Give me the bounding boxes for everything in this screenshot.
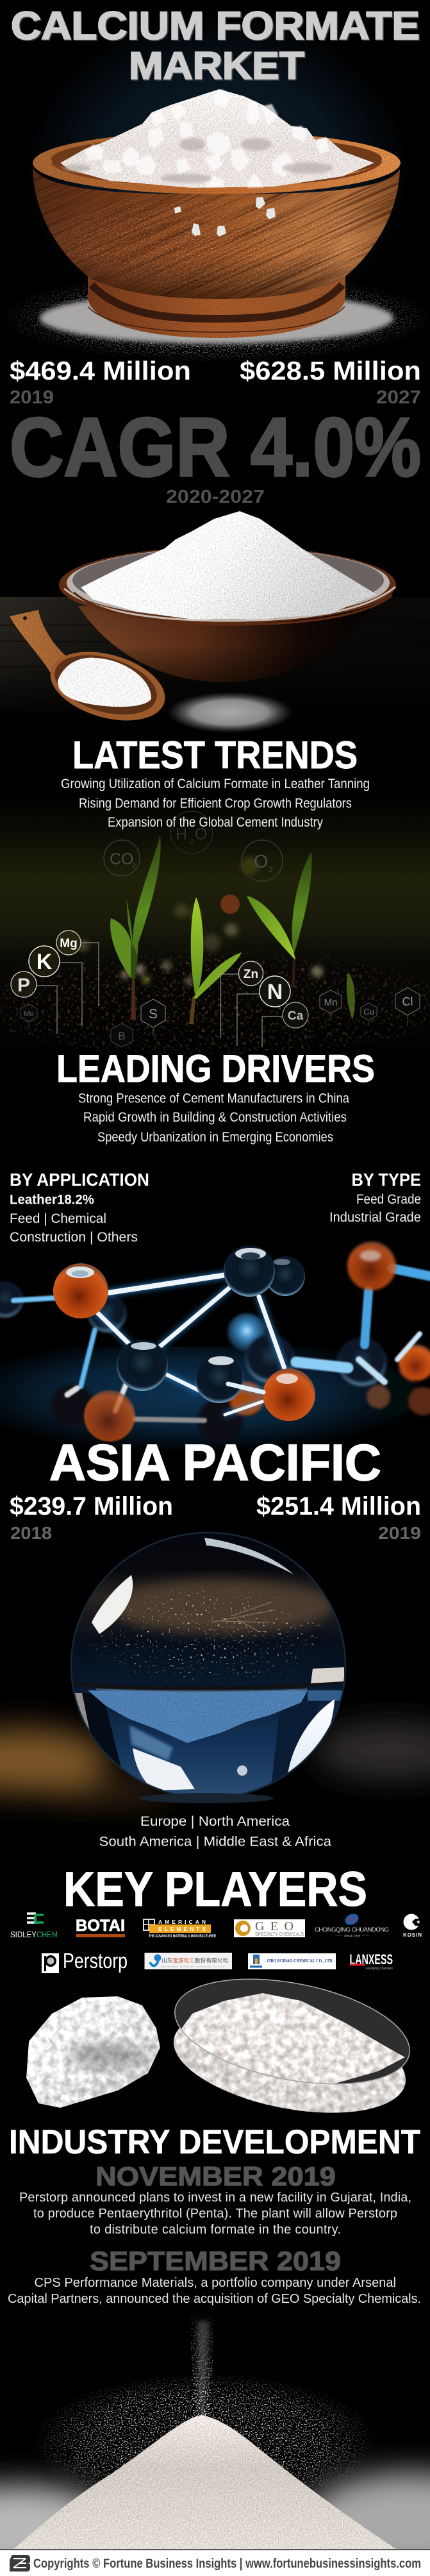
panel: seedlings with nutrient elements <box>0 795 430 1065</box>
logo: Lanxess <box>350 1951 393 1971</box>
orange atom back low <box>84 1390 135 1442</box>
title: CALCIUM FORMATE <box>12 5 420 49</box>
gas circle H2O: O <box>195 825 207 843</box>
segment: by type <box>329 1170 421 1225</box>
segment: by application: Leather18.2% <box>10 1193 94 1207</box>
stat: 2027 market value: $628.5 Million <box>240 356 421 385</box>
segment: by type: BY TYPE <box>351 1170 421 1190</box>
water line <box>72 1681 345 1688</box>
driver list: Speedy Urbanization in Emerging Economies <box>97 1130 333 1145</box>
development: November 2019: Perstorp announced plans to invest in a new facility in Gujarat, India, <box>19 2191 411 2205</box>
panel: powder rock and petri dish <box>26 1979 410 2113</box>
stat: 2019 market value: $469.4 Million <box>10 356 191 385</box>
dish wall with powder <box>165 1992 415 2130</box>
heading: leading drivers: LEADING DRIVERS <box>56 1047 375 1090</box>
development: September 2019 <box>8 2246 421 2306</box>
red bokeh <box>220 895 240 914</box>
panel: hero bowl of calcium formate crystals <box>3 29 430 362</box>
orange atom F <box>263 1368 315 1421</box>
powder pile <box>81 511 377 619</box>
logo: Shandong Baoyuan: SHANDONG BAOYUAN CHEMICAL CO.,LTD. <box>161 1966 226 1968</box>
gas circle CO2: CO <box>110 850 133 868</box>
white bonds <box>97 1275 285 1415</box>
stat: 2019 market value: 2019 <box>10 387 54 408</box>
nutrient connector lines <box>36 943 283 1047</box>
stat: asia pacific 2019: $251.4 Million <box>256 1492 421 1520</box>
wooden table <box>0 597 430 719</box>
dark atom B <box>224 1245 275 1297</box>
hex element Cl <box>395 988 420 1026</box>
logo: Sidleychem <box>10 1914 58 1939</box>
gas circle O2: O <box>254 852 269 872</box>
hex element Mo <box>21 1004 37 1029</box>
logo: American Elements: AMERICAN <box>158 1919 206 1925</box>
hex element B: B <box>118 1030 126 1042</box>
trend list: Expansion of the Global Cement Industry <box>108 815 323 830</box>
logo: American Elements: THE ADVANCED MATERIALS MANUFACTURER <box>149 1935 217 1939</box>
bowl rim <box>59 546 396 623</box>
element P <box>11 972 37 997</box>
title: MARKET <box>129 45 305 88</box>
wooden spoon <box>10 610 173 732</box>
logo: American Elements: ELEMENTS <box>158 1926 206 1932</box>
segment: by application <box>10 1170 149 1245</box>
development: November 2019: to produce Pentaerythritol (Penta). The plant will allow Perstorp <box>33 2207 397 2221</box>
blue background bonds <box>13 1268 430 1420</box>
footer <box>0 2549 430 2576</box>
development: November 2019: NOVEMBER 2019 <box>95 2161 336 2191</box>
logo: Perstorp: Perstorp <box>63 1949 128 1973</box>
trend list: Rising Demand for Efficient Crop Growth Regulators <box>79 796 352 811</box>
feather highlight <box>211 1602 276 1632</box>
element P: P <box>17 975 30 996</box>
stat: asia pacific 2019 <box>256 1492 421 1543</box>
salt flakes on bowl <box>174 197 276 237</box>
hex element Cu: Cu <box>363 1007 374 1016</box>
orange atom A <box>53 1263 108 1318</box>
hex element S <box>141 999 165 1036</box>
logo: Zibo Ruibao: ZIBO RUIBAO CHEMICAL CO., LTD. <box>267 1958 333 1964</box>
stat: 2027 market value <box>240 356 421 408</box>
element Ca: Ca <box>288 1009 304 1023</box>
logo: Chongqing Chuandong: SINCE 1998 <box>344 1934 361 1937</box>
logo: Zibo Ruibao <box>248 1953 336 1969</box>
crystal salt pile <box>60 89 374 188</box>
bubbles <box>80 1584 336 1687</box>
title: MARKET <box>129 44 304 87</box>
seedling 3 <box>247 852 312 988</box>
logo: Botai: BOTAI <box>76 1917 125 1935</box>
panel: crystal ball <box>0 1529 430 1803</box>
logo: Sidleychem: SIDLEY <box>10 1930 37 1939</box>
blurred background atoms <box>0 1281 430 1443</box>
logo: GEO Specialty Chemicals: GEO <box>255 1919 294 1933</box>
rim front edge <box>74 593 392 625</box>
element Mg: Mg <box>60 937 78 950</box>
gas circle O2: 2 <box>269 865 273 874</box>
segment: by type: Feed Grade <box>356 1192 421 1207</box>
hex element Mn <box>320 990 342 1021</box>
element Mg <box>56 930 81 955</box>
dark atom D <box>117 1340 168 1391</box>
driver list <box>78 1091 349 1145</box>
panel: powder bowl on wooden table <box>0 511 430 733</box>
hex element Cu <box>361 1003 377 1026</box>
hex element B <box>111 1023 133 1047</box>
floor glow <box>0 1347 430 1452</box>
region list: Europe | North America <box>140 1814 290 1829</box>
sparkle <box>26 2430 359 2546</box>
driver list: Rapid Growth in Building & Construction Activities <box>83 1110 347 1125</box>
element Zn: Zn <box>244 968 258 981</box>
segment: by application: Construction | Others <box>10 1230 138 1245</box>
element N: N <box>267 980 283 1004</box>
bowl body <box>78 606 373 682</box>
back dark atom <box>265 1256 305 1296</box>
dish interior <box>166 1962 418 2101</box>
hex element Cl: Cl <box>402 995 413 1008</box>
logo: Kosin: KOSIN <box>403 1932 422 1938</box>
panel: powder pile with falling stream <box>0 2309 430 2575</box>
trend list: Growing Utilization of Calcium Formate in Leather Tanning <box>61 777 370 791</box>
logo: Shandong Baoyuan <box>145 1953 232 1969</box>
heap <box>13 2415 397 2550</box>
dark atom E <box>195 1354 244 1403</box>
logo: Shandong Baoyuan: 山东宝源化工股份有限公司 <box>161 1957 228 1964</box>
salt heap under bowl <box>40 292 393 344</box>
seedling 1 <box>110 835 161 1020</box>
element Zn <box>238 961 263 986</box>
seedling 2 <box>189 897 242 1024</box>
heading: asia pacific: ASIA PACIFIC <box>49 1434 381 1491</box>
icon: Fortune Business Insights logo <box>10 2555 30 2572</box>
glass sphere <box>64 1529 352 1803</box>
stat: CAGR: 2020-2027 <box>166 487 265 507</box>
development: September 2019: SEPTEMBER 2019 <box>90 2246 341 2276</box>
seedling 4 <box>347 972 355 1020</box>
logo: GEO Specialty Chemicals: SPECIALTY CHEMICALS <box>255 1932 304 1937</box>
hex element Mn: Mn <box>324 997 337 1008</box>
title <box>11 4 420 88</box>
upper right white band <box>311 1667 344 1683</box>
calcium formate rock <box>26 1996 160 2108</box>
gas circle CO2: 2 <box>132 863 136 870</box>
powder in dish <box>178 1993 405 2085</box>
segment: by type: Industrial Grade <box>329 1210 421 1225</box>
logo: Lanxess: LANXESS <box>350 1951 393 1967</box>
heading: key players: KEY PLAYERS <box>63 1862 367 1917</box>
development: September 2019: CPS Performance Materials, a portfolio company under Arsenal <box>35 2276 396 2290</box>
region list: South America | Middle East & Africa <box>99 1834 331 1849</box>
element N <box>260 976 290 1007</box>
falling stream <box>190 2309 215 2418</box>
element K <box>29 946 60 977</box>
orange atom back right <box>347 1242 396 1290</box>
gas circle CO2 <box>104 840 140 876</box>
logo: American Elements <box>144 1919 217 1939</box>
segment: by application: BY APPLICATION <box>10 1170 149 1190</box>
bowl foot <box>88 276 345 338</box>
front white bond stub <box>228 1384 263 1392</box>
hex element Mo: Mo <box>24 1010 34 1018</box>
region list <box>99 1814 331 1849</box>
element K: K <box>37 950 53 974</box>
driver list: Strong Presence of Cement Manufacturers in China <box>78 1091 349 1106</box>
stat: asia pacific 2018: 2018 <box>10 1523 52 1543</box>
sphere base <box>139 1793 274 1803</box>
bokeh lights <box>78 857 323 985</box>
warm reflection <box>109 1579 333 1633</box>
logo: Chongqing Chuandong: W <box>349 1916 356 1924</box>
bowl rim <box>33 131 401 194</box>
logo: Sidleychem: CHEM <box>37 1930 58 1939</box>
title: CALCIUM FORMATE <box>11 4 420 47</box>
development: November 2019: to distribute calcium formate in the country. <box>90 2223 341 2237</box>
bowl body <box>33 168 400 299</box>
gas circle H2O: H <box>176 825 187 843</box>
gas circle H2O: 2 <box>190 838 194 846</box>
element Ca <box>283 1002 308 1028</box>
logo: Lanxess: Energizing Chemistry <box>366 1967 393 1971</box>
soil <box>0 946 430 1055</box>
trend list <box>61 777 370 830</box>
panel: molecule model <box>0 1242 430 1452</box>
ice crystals <box>88 1690 308 1743</box>
stat: asia pacific 2019: 2019 <box>378 1523 421 1543</box>
logo: Perstorp <box>42 1949 128 1973</box>
development: November 2019 <box>19 2161 411 2237</box>
table glow <box>0 1722 430 1801</box>
stat: 2019 market value <box>10 356 191 408</box>
stat: asia pacific 2018: $239.7 Million <box>10 1492 173 1520</box>
stat: asia pacific 2018 <box>10 1492 173 1543</box>
petri dish <box>173 1979 410 2113</box>
glares <box>204 1538 294 1574</box>
segment: by application: Feed | Chemical <box>10 1211 106 1226</box>
flying particles <box>32 2373 378 2514</box>
sphere edge <box>71 1533 345 1798</box>
hex element S: S <box>149 1007 158 1022</box>
spilled powder <box>167 692 293 733</box>
gas circle O2 <box>242 840 283 881</box>
logo: Chongqing Chuandong <box>315 1912 389 1937</box>
stat: 2027 market value: 2027 <box>376 387 421 408</box>
logo: Kosin <box>403 1914 422 1938</box>
gas circle H2O <box>170 811 213 854</box>
development: September 2019: Capital Partners, announced the acquisition of GEO Specialty Chemicals. <box>8 2292 421 2306</box>
fog <box>0 2472 430 2575</box>
logo: Chongqing Chuandong: CHONGQING CHUANDONG <box>315 1926 389 1933</box>
dark side bands <box>75 1693 121 1767</box>
logo: GEO Specialty Chemicals <box>234 1919 305 1937</box>
scattered salt particles <box>0 273 430 362</box>
heading: latest trends: LATEST TRENDS <box>72 734 358 777</box>
